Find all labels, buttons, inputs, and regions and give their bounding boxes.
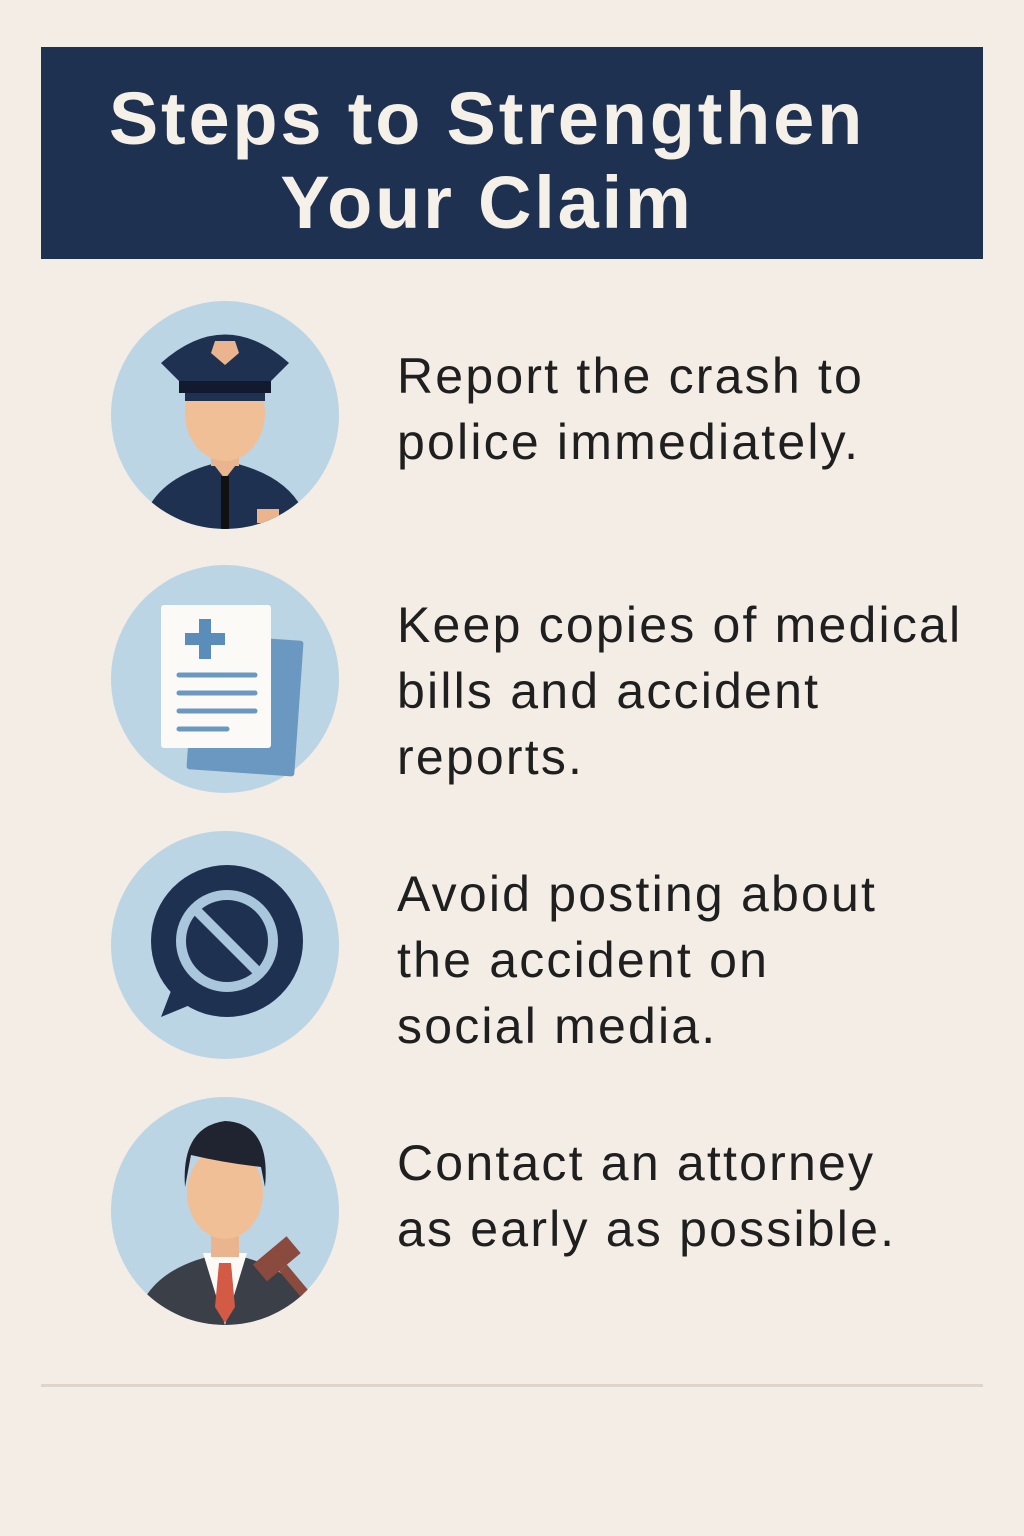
text: step 3: social media.: [397, 998, 717, 1054]
text: step 1: police immediately.: [397, 414, 860, 470]
text: step 2: reports.: [397, 729, 584, 785]
text: step 4: [397, 1135, 896, 1257]
title: Steps to Strengthen: [109, 77, 865, 160]
icon: no posting speech bubble: [111, 831, 339, 1059]
icon: medical documents: [111, 565, 339, 793]
text: step 2: [397, 597, 962, 785]
text: step 3: [397, 866, 877, 1054]
text: step 4: Contact an attorney: [397, 1135, 875, 1191]
header banner: [41, 47, 983, 259]
icon: attorney with gavel: [111, 1097, 339, 1325]
title: [109, 77, 865, 244]
text: step 1: Report the crash to: [397, 348, 864, 404]
text: step 2: bills and accident: [397, 663, 820, 719]
text: step 3: Avoid posting about: [397, 866, 877, 922]
icon: police officer: [111, 301, 339, 529]
title: Your Claim: [280, 161, 694, 244]
text: step 2: Keep copies of medical: [397, 597, 962, 653]
text: step 1: [397, 348, 864, 470]
text: step 3: the accident on: [397, 932, 769, 988]
text: step 4: as early as possible.: [397, 1201, 896, 1257]
